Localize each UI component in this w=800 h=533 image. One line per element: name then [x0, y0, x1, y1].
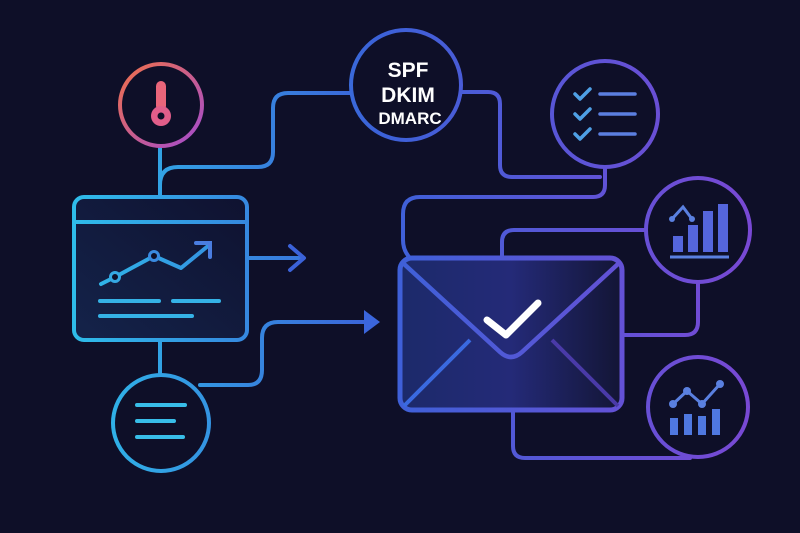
icon: bar chart circle [646, 178, 750, 282]
icon: checklist circle [552, 61, 658, 167]
icon: line and bar chart circle [648, 357, 748, 457]
SPF DKIM DMARC circle: DKIM [381, 84, 435, 107]
icon: envelope with check [400, 258, 622, 410]
panel: dashboard window [74, 197, 247, 340]
arrow heads [290, 246, 380, 334]
SPF DKIM DMARC circle: DMARC [378, 109, 442, 128]
icon: list circle [113, 375, 209, 471]
SPF DKIM DMARC circle: SPF [388, 59, 429, 82]
connector lines [160, 92, 698, 458]
icon: thermometer circle [120, 64, 202, 146]
SPF DKIM DMARC circle [351, 30, 461, 140]
